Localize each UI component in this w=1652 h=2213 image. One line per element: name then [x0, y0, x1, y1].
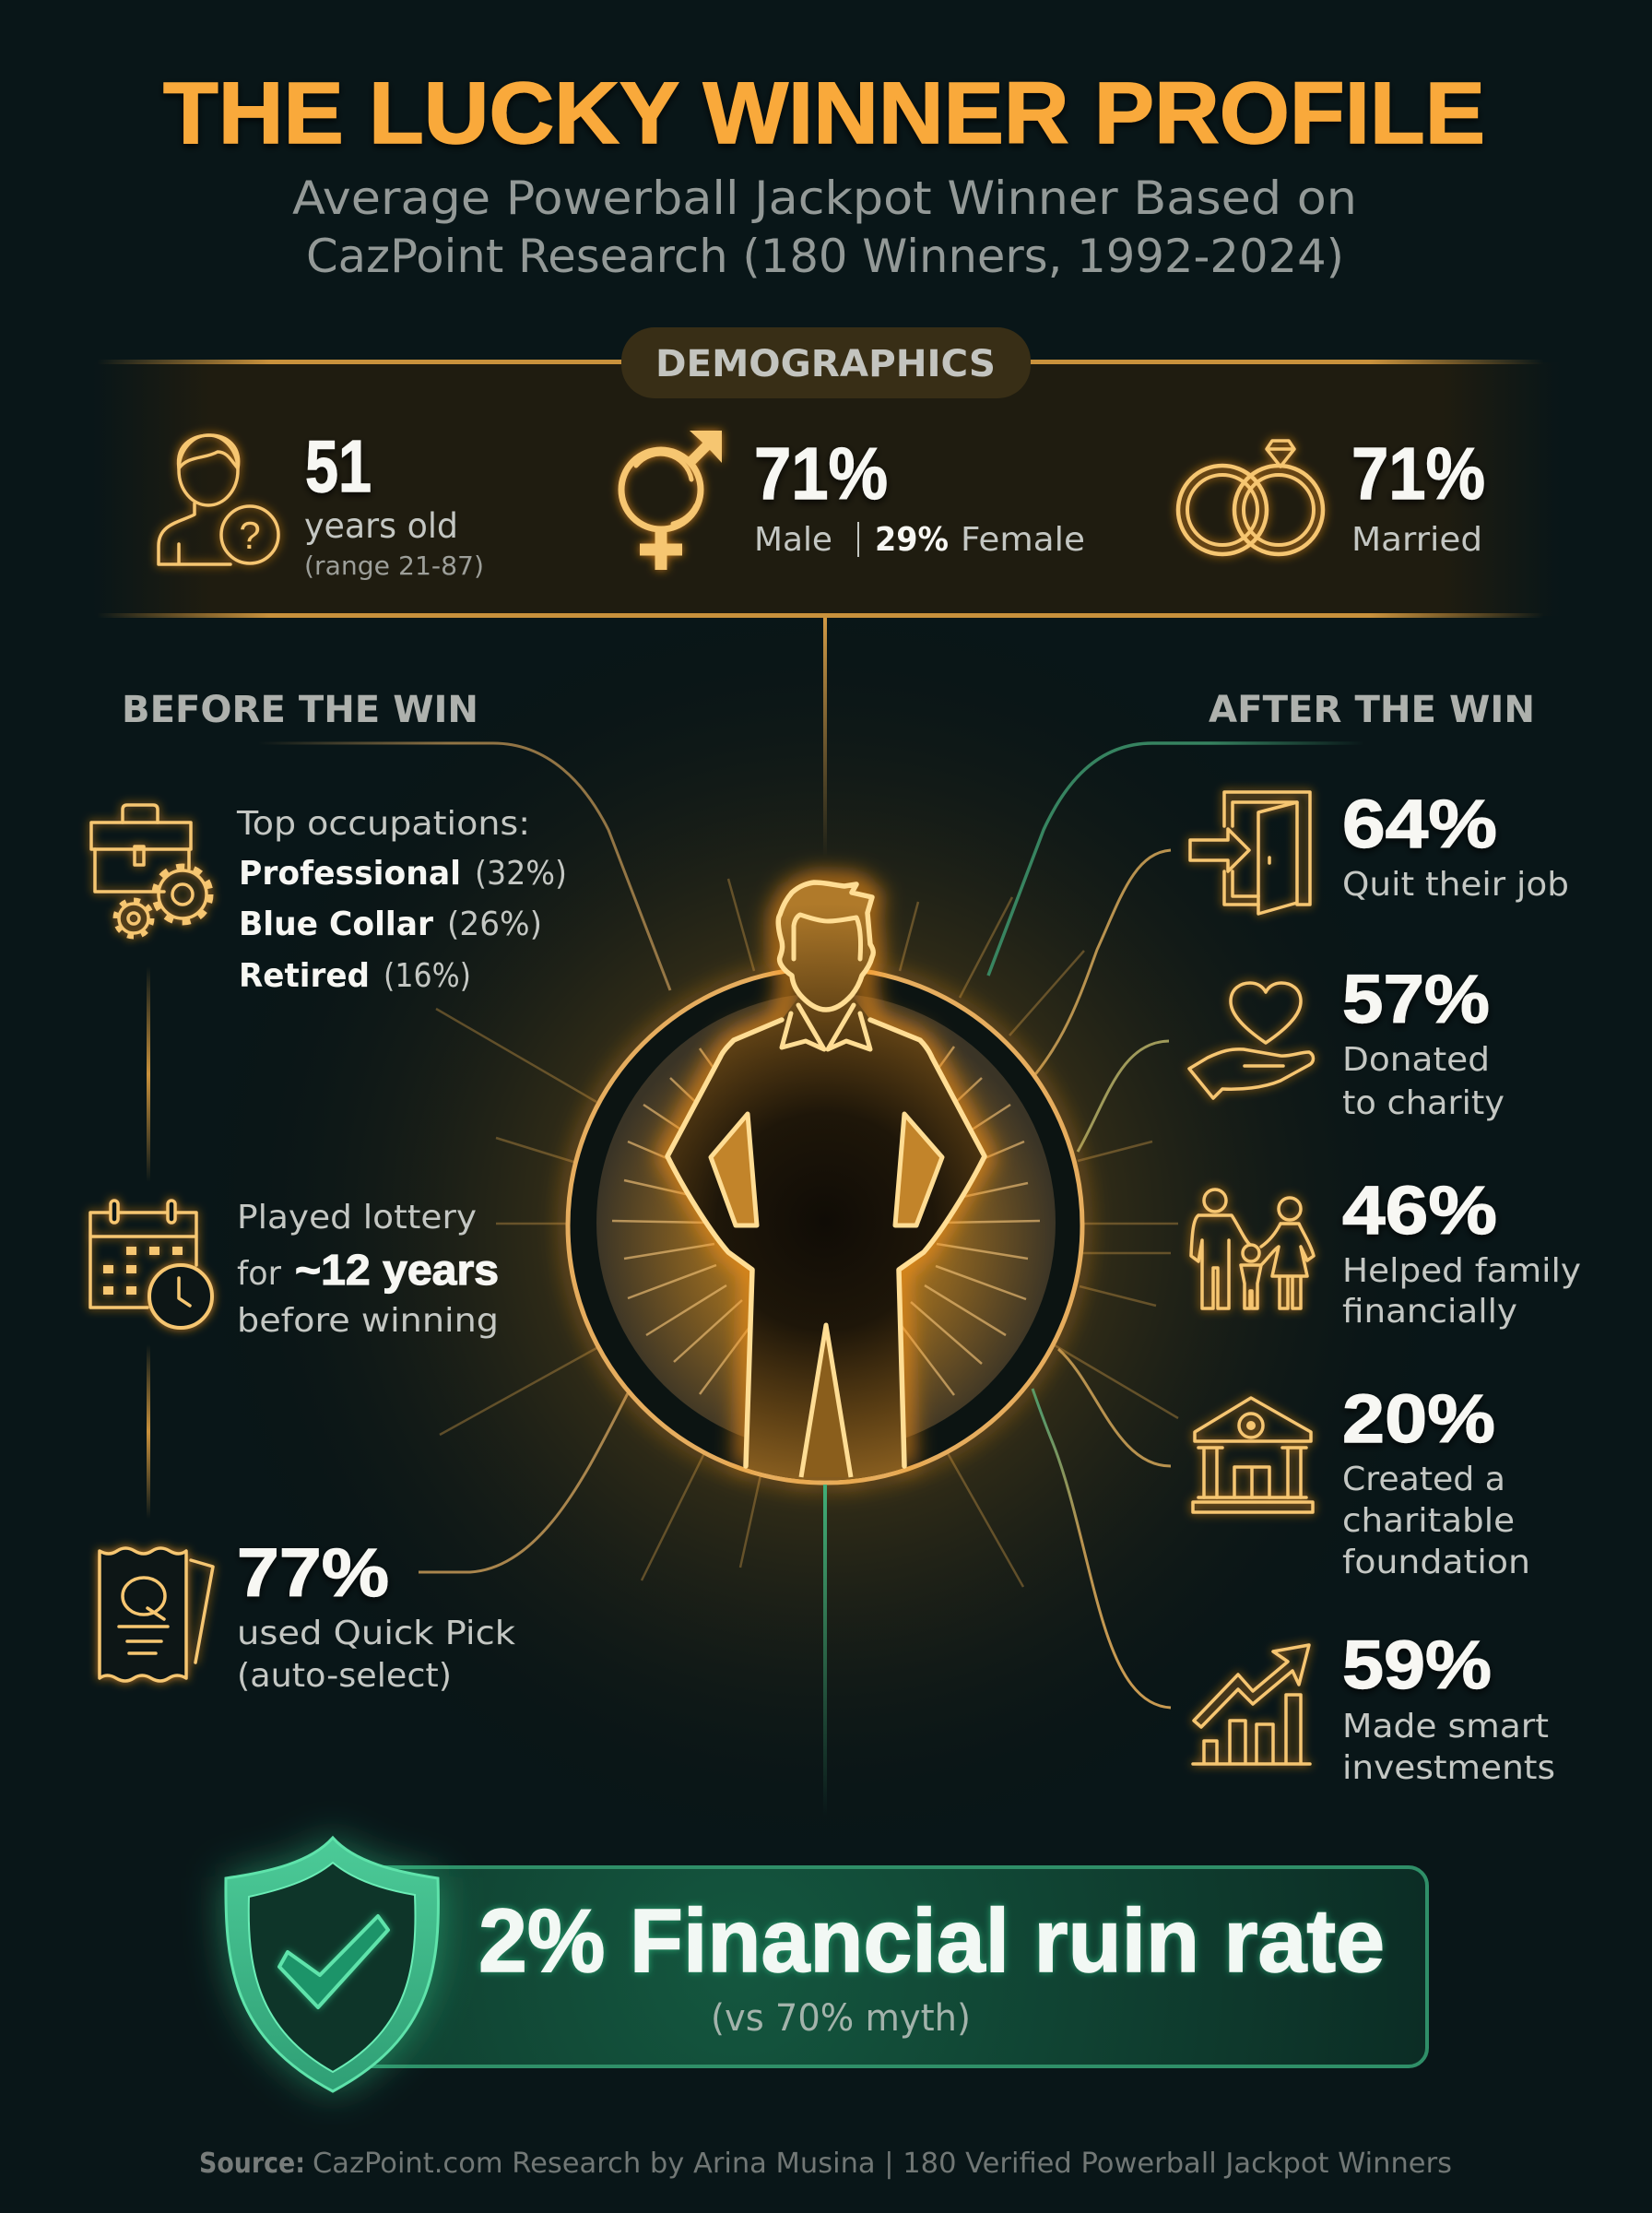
text: top occupations	[236, 805, 567, 995]
connector: left vertical lines	[147, 966, 150, 1519]
callout banner: (vs 70% myth)	[711, 1997, 971, 2040]
connector: center top line	[823, 616, 827, 858]
source line: Source:	[199, 2148, 305, 2180]
text: quick pick: 77%	[237, 1534, 389, 1611]
text: helped family: financially	[1342, 1293, 1517, 1331]
text: played lottery	[237, 1199, 499, 1340]
icon: briefcase and gears	[91, 805, 210, 937]
stat: gender: Male	[754, 521, 832, 559]
text: quit their job: 64%	[1342, 786, 1497, 862]
connector: charity curve	[1078, 1041, 1169, 1152]
icon: shield with check	[226, 1838, 438, 2091]
before item: quick pick	[100, 1534, 515, 1695]
icon: wedding rings	[1178, 441, 1323, 554]
subtitle: Average Powerball Jackpot Winner Based on	[292, 172, 1357, 225]
heading: after the win: AFTER THE WIN	[1209, 689, 1535, 731]
text: played lottery: for	[237, 1255, 281, 1293]
subtitle: CazPoint Research (180 Winners, 1992-2024)	[306, 230, 1344, 283]
text: smart investments: 59%	[1342, 1627, 1492, 1703]
central figure	[568, 882, 1082, 1483]
text: smart investments	[1342, 1627, 1555, 1787]
after item: donated	[1189, 961, 1504, 1122]
icon: heart in hand	[1189, 983, 1313, 1098]
text: top occupations: (16%)	[384, 957, 471, 995]
text: quit their job	[1342, 786, 1569, 904]
icon: lottery ticket	[100, 1548, 213, 1681]
text: charitable foundation: Created a	[1342, 1461, 1505, 1498]
rays inside circle	[612, 1047, 1040, 1395]
connectors: radial rays outside circle	[436, 879, 1178, 1587]
text: charitable foundation: 20%	[1342, 1380, 1495, 1457]
subtitle	[292, 172, 1357, 283]
medallion circle	[568, 968, 1082, 1483]
text: helped family	[1342, 1172, 1581, 1331]
text: quick pick: used Quick Pick	[237, 1615, 515, 1652]
callout banner: 2% Financial ruin rate	[478, 1890, 1385, 1991]
callout banner	[350, 1867, 1427, 2066]
title: THE LUCKY WINNER PROFILE	[163, 65, 1485, 162]
icon: person with question mark: ?	[239, 514, 261, 557]
icon: gender symbols	[621, 431, 722, 570]
text: quick pick	[237, 1534, 515, 1695]
text: quit their job: Quit their job	[1342, 866, 1569, 904]
leg gap	[801, 1325, 851, 1477]
connector: foundation curve	[1058, 1349, 1171, 1466]
text: charitable foundation: charitable	[1342, 1502, 1515, 1540]
icon: family	[1191, 1189, 1314, 1308]
heading: before the win: BEFORE THE WIN	[122, 689, 478, 731]
icon: person with question mark	[159, 435, 278, 564]
text: donated to charity: 57%	[1342, 961, 1490, 1037]
connector: after the win green curve	[988, 743, 1364, 976]
after item: foundation	[1193, 1380, 1530, 1581]
body glow	[667, 882, 985, 1475]
hairline and collar	[782, 915, 870, 1049]
text: top occupations: (26%)	[447, 905, 542, 943]
arm gaps	[711, 1114, 942, 1225]
stat: gender: 29%	[875, 521, 949, 559]
source line: CazPoint.com Research by Arina Musina | 180 Verified Powerball Jackpot Winners	[313, 2148, 1452, 2180]
stat: age: 51	[305, 425, 372, 507]
icon: bank building	[1193, 1398, 1313, 1512]
stat: gender	[754, 432, 1085, 559]
heading pill: demographics	[621, 327, 1031, 398]
icon: door with arrow	[1190, 792, 1310, 914]
icon: rising chart	[1193, 1645, 1310, 1764]
heading pill: demographics: DEMOGRAPHICS	[655, 343, 996, 385]
text: helped family: 46%	[1342, 1172, 1497, 1249]
after item: quit job	[1190, 786, 1569, 914]
text: helped family: Helped family	[1342, 1252, 1581, 1290]
stat: gender: Female	[961, 521, 1085, 559]
text: quick pick: (auto-select)	[237, 1657, 452, 1695]
connector: investments curve	[1032, 1389, 1171, 1708]
text: top occupations: Top occupations:	[236, 805, 530, 843]
text: charitable foundation	[1342, 1380, 1530, 1581]
text: top occupations: Retired	[239, 957, 370, 995]
silhouette outline	[667, 882, 985, 1466]
stat: age: years old	[304, 506, 458, 546]
stat: married	[1351, 432, 1485, 559]
after item: helped family	[1191, 1172, 1581, 1331]
silhouette fill	[667, 882, 985, 1481]
connector: quick pick curve	[419, 1393, 628, 1572]
text: donated to charity	[1342, 961, 1504, 1122]
text: top occupations: Professional	[239, 855, 461, 893]
ring glow	[568, 968, 1082, 1483]
before item: occupations	[91, 805, 567, 995]
text: smart investments: Made smart	[1342, 1708, 1549, 1746]
text: top occupations: (32%)	[475, 855, 567, 893]
stat: age	[304, 425, 484, 581]
text: top occupations: Blue Collar	[239, 905, 433, 943]
text: smart investments: investments	[1342, 1749, 1555, 1787]
before item: years played	[90, 1199, 499, 1340]
stat: married: 71%	[1351, 432, 1485, 515]
stat: gender: 71%	[754, 432, 888, 515]
text: played lottery: Played lottery	[237, 1199, 477, 1237]
after item: investments	[1193, 1627, 1555, 1787]
stat: married: Married	[1351, 521, 1482, 559]
text: donated to charity: to charity	[1342, 1084, 1504, 1122]
text: played lottery: ~12 years	[295, 1246, 499, 1294]
text: played lottery: before winning	[237, 1302, 499, 1340]
icon: calendar and clock	[90, 1201, 212, 1328]
stat: age: (range 21-87)	[304, 550, 484, 581]
callout: financial ruin rate	[226, 1838, 1427, 2091]
connector: before the win curve	[258, 743, 670, 990]
text: charitable foundation: foundation	[1342, 1544, 1530, 1581]
connector: center bottom line	[823, 1485, 827, 1817]
connector: quit job curve	[1009, 850, 1171, 1102]
panel: demographics	[92, 327, 1560, 618]
text: donated to charity: Donated	[1342, 1041, 1490, 1079]
